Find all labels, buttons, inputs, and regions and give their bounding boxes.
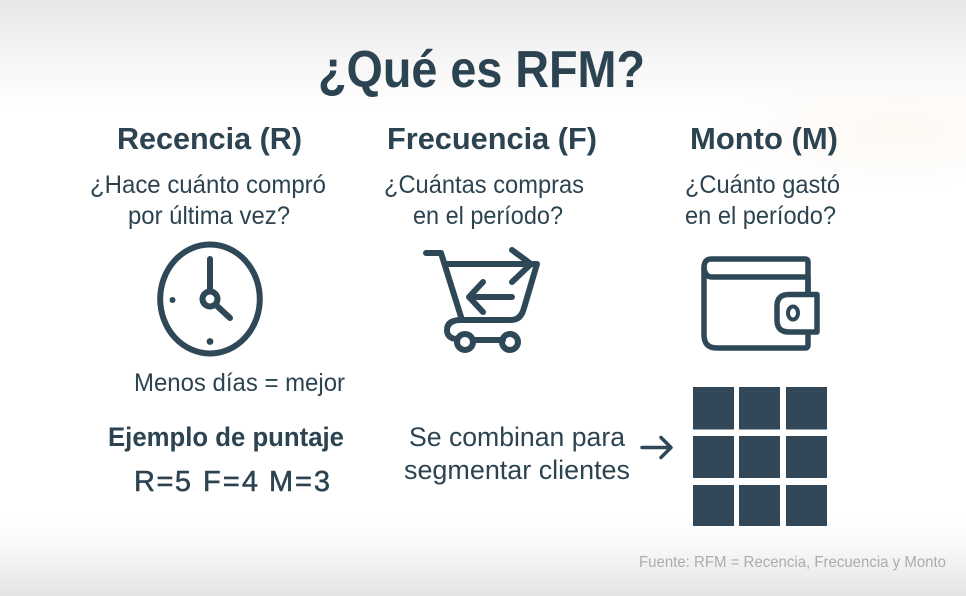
- scores: [134, 466, 330, 498]
- question: Frecuencia: en el período?: [413, 202, 563, 230]
- column: Recencia: [90, 121, 345, 397]
- segment grid: [693, 387, 827, 526]
- source note: Fuente: RFM = Recencia, Frecuencia y Monto: [639, 554, 946, 571]
- question: Monto: ¿Cuánto gastó: [685, 171, 840, 199]
- heading: ejemplo de puntaje: Ejemplo de puntaje: [108, 422, 344, 452]
- title: ¿Qué es RFM?: [318, 41, 645, 99]
- question: Frecuencia: ¿Cuántas compras: [384, 171, 584, 199]
- heading: Frecuencia: Frecuencia (F): [387, 121, 597, 156]
- score example: [108, 422, 344, 498]
- icon: shopping cart with arrows: [426, 250, 537, 350]
- arrow: [642, 438, 671, 458]
- question: Recencia: [90, 171, 326, 230]
- question: Monto: en el período?: [685, 202, 836, 230]
- icon: wallet: [704, 259, 817, 348]
- text: combine to segment: [404, 422, 630, 485]
- note: menos días: Menos días = mejor: [134, 369, 345, 397]
- question: Recencia: ¿Hace cuánto compró: [90, 171, 326, 199]
- scores: R=5: [134, 466, 191, 498]
- question: Frecuencia: [384, 171, 584, 230]
- text: combine to segment: Se combinan para: [409, 422, 626, 452]
- question: Monto: [685, 171, 840, 230]
- heading: Recencia: Recencia (R): [117, 121, 302, 156]
- text: combine to segment: segmentar clientes: [404, 455, 630, 485]
- scores: M=3: [269, 466, 330, 498]
- column: Frecuencia: [384, 121, 597, 350]
- question: Recencia: por última vez?: [128, 202, 290, 230]
- column: Monto: [685, 121, 840, 348]
- scores: F=4: [203, 466, 258, 498]
- heading: Monto: Monto (M): [690, 121, 838, 156]
- icon: clock: [160, 244, 260, 354]
